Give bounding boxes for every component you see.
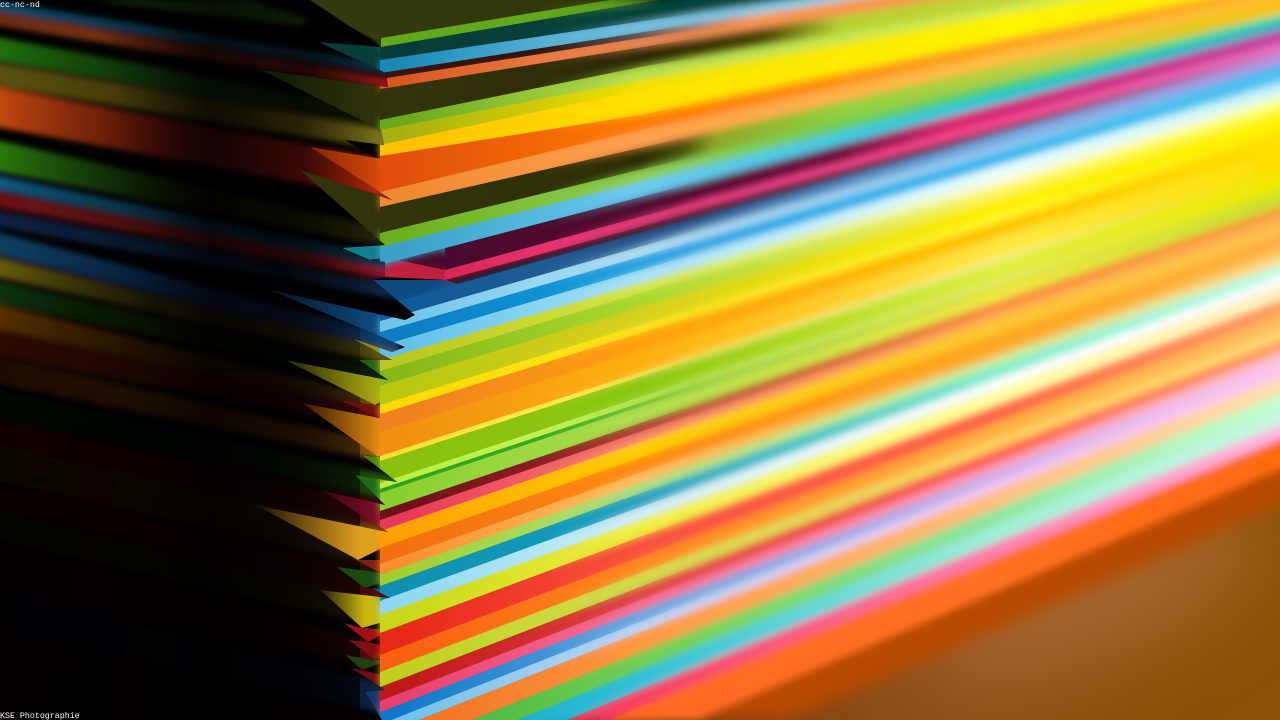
coloured sheet edges fading into shadow: [0, 0, 420, 720]
paper bands: out-of-focus layer: [300, 0, 1280, 720]
shadowed left side of the stack: [0, 0, 415, 720]
folded sheet flaps around the corner: [252, 40, 462, 720]
paper bands: in-focus layer near the fold: [310, 0, 690, 720]
table surface: blurred brown: [600, 400, 1280, 720]
licence label: cc-nc-nd: [0, 0, 40, 10]
